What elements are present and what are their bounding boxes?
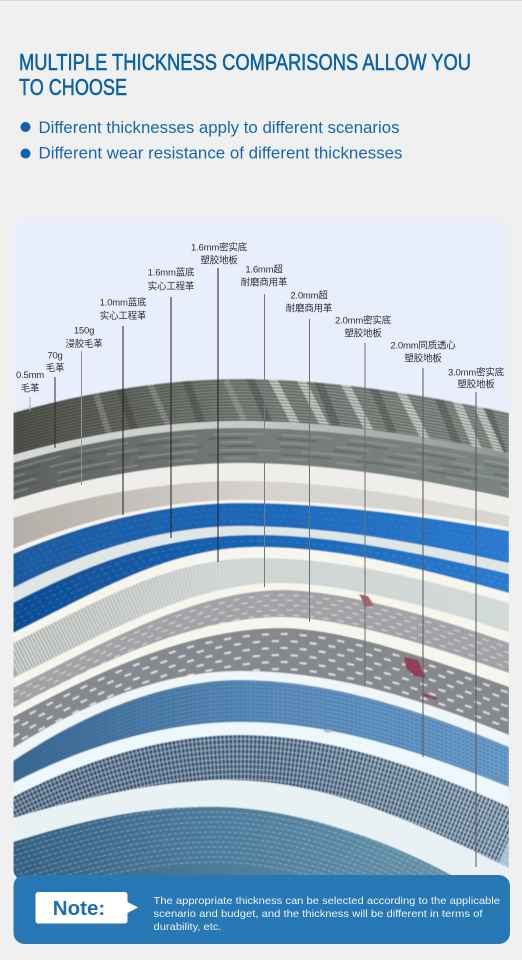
band: 1.0mm blue (14, 502, 509, 588)
callout: 1.0mm blue engineering leather: 1.0mm蓝底 (100, 296, 147, 308)
heading (19, 49, 471, 100)
callout: 2.0mm dense plastic floor: 2.0mm密实底 (335, 314, 392, 326)
callout: 2.0mm super wear commercial leather: 耐磨商用革 (286, 302, 333, 314)
callout: 70g fur leather (46, 350, 65, 448)
callout: 1.0mm blue engineering leather (100, 296, 147, 515)
callout: 1.6mm super wear commercial leather: 1.6mm超 (245, 264, 283, 276)
band: 2.0mm super white base (14, 616, 509, 718)
note tag: Note: (53, 897, 105, 920)
callout: 2.0mm homogeneous plastic floor (390, 340, 456, 757)
callout: 2.0mm dense plastic floor: 塑胶地板 (344, 328, 382, 340)
callout: 2.0mm homogeneous plastic floor: 塑胶地板 (404, 352, 442, 364)
callout: 2.0mm dense plastic floor (335, 314, 392, 686)
callout: 70g fur leather: 70g (47, 350, 63, 362)
note text: The appropriate thickness can be selected according to the applicable (154, 895, 500, 907)
note background (14, 875, 510, 944)
callout: 150g impregnated fur leather (65, 326, 103, 485)
callout: 3.0mm dense plastic floor: 3.0mm密实底 (448, 366, 505, 378)
note tag (36, 892, 138, 924)
band: 150g impregnated fabric (14, 462, 509, 549)
band: 1.6mm dense white base (14, 546, 509, 644)
bullet: scenarios: Different thicknesses apply to different scenarios (38, 119, 400, 137)
callout: 1.6mm dense plastic floor (191, 242, 248, 562)
band: 1.6mm super white base (14, 582, 509, 688)
stain (359, 594, 374, 607)
top edge line (0, 0, 522, 1)
note text (154, 895, 500, 933)
callout: 1.6mm dense plastic floor: 塑胶地板 (200, 254, 238, 266)
band: 3.0mm white base (14, 721, 509, 808)
callout: 0.5mm fur leather (16, 370, 44, 411)
callout: 3.0mm dense plastic floor (448, 366, 505, 867)
band: 0.5mm fabric (14, 378, 509, 456)
band: 1.6mm super grey (14, 590, 509, 708)
panel background (14, 220, 509, 890)
note text: scenario and budget, and the thickness will be different in terms of (154, 908, 483, 920)
band: 1.6mm blue (14, 534, 509, 634)
callout: 2.0mm super wear commercial leather (286, 290, 333, 622)
band: 70g grey felt (14, 428, 509, 500)
callout: 1.6mm blue engineering leather (148, 266, 195, 538)
band: 3.0mm dark weave (13, 735, 509, 880)
callout: 1.0mm blue engineering leather: 实心工程革 (100, 310, 147, 322)
callout: 0.5mm fur leather: 0.5mm (16, 370, 44, 381)
callout: 1.6mm super wear commercial leather: 耐磨商用革 (241, 276, 288, 288)
callout: 1.6mm dense plastic floor: 1.6mm密实底 (191, 242, 248, 254)
callout: 0.5mm fur leather: 毛革 (21, 382, 40, 394)
bullet list (20, 119, 402, 162)
band: 1.0mm edge (14, 500, 509, 554)
band: 70g fabric backing strip (14, 420, 509, 464)
note text: durability, etc. (154, 921, 222, 933)
callout: 150g impregnated fur leather: 150g (74, 326, 94, 336)
callout: 3.0mm dense plastic floor: 塑胶地板 (457, 378, 495, 390)
callout: 1.6mm blue engineering leather: 1.6mm蓝底 (148, 266, 195, 278)
callout: 2.0mm super wear commercial leather: 2.0mm超 (290, 290, 328, 302)
material sample photo bands (14, 378, 509, 878)
band: bottom teal weave (14, 806, 452, 878)
band: bottom white base (13, 780, 509, 880)
band: 2.0mm dense grey (14, 628, 509, 748)
bullet: wear resistance: Different wear resistance of different thicknesses (38, 144, 402, 162)
band: 2.0mm homogeneous white base (14, 670, 509, 762)
heading: TO CHOOSE (19, 74, 127, 100)
panel: thickness comparison (13, 220, 509, 939)
callout: 150g impregnated fur leather: 浸胶毛革 (65, 338, 103, 350)
callout: 1.6mm super wear commercial leather (241, 264, 288, 587)
band: 1.6mm dense light grey (14, 558, 509, 678)
callout: 2.0mm homogeneous plastic floor: 2.0mm同质透心 (390, 340, 456, 352)
panel: note (14, 875, 510, 944)
band: 2.0mm homogeneous blue (14, 680, 509, 788)
callout: 70g fur leather: 毛革 (46, 362, 65, 374)
band: 1.6mm pale layer (14, 525, 509, 604)
stain (404, 657, 438, 700)
callout: 1.6mm blue engineering leather: 实心工程革 (148, 280, 195, 292)
